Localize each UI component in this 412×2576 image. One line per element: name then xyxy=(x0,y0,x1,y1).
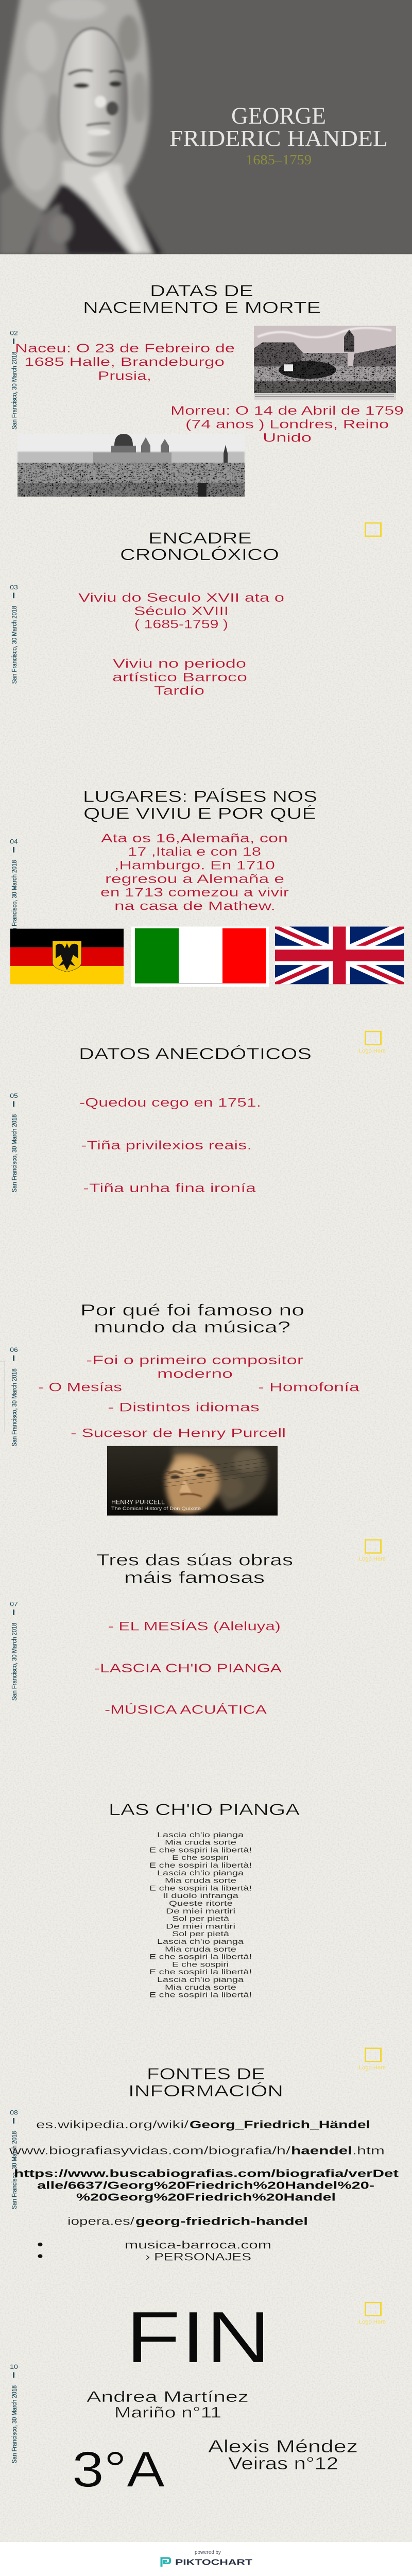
heading xyxy=(128,2065,283,2100)
author 2 xyxy=(208,2436,358,2473)
flag: United Kingdom xyxy=(275,927,404,984)
lyrics text block: E che sospiri xyxy=(172,1854,229,1862)
source: musica-barroca list xyxy=(38,2239,271,2263)
heading: máis famosas xyxy=(124,1569,265,1587)
anecdotes list: -Quedou cego en 1751. xyxy=(79,1095,261,1109)
lyrics text block: E che sospiri la libertà! xyxy=(149,1953,252,1961)
logo placeholder 3 xyxy=(359,1540,386,1562)
lyrics text block: E che sospiri la libertà! xyxy=(149,1969,252,1976)
heading: LUGARES: PAÍSES NOS xyxy=(83,788,317,806)
footer: powered by Piktochart: powered by xyxy=(195,2550,221,2555)
section 08: fontes de informacion xyxy=(9,2065,399,2263)
chronology text xyxy=(78,590,284,631)
logo placeholder 4 xyxy=(359,2048,386,2071)
reasons list: - Homofonía xyxy=(258,1380,359,1394)
lyrics text block: E che sospiri la libertà! xyxy=(149,1861,252,1870)
hero title text xyxy=(170,108,386,165)
source: wikipedia: es.wikipedia.org/wiki/ xyxy=(36,2119,189,2131)
chronology text: Viviu do Seculo XVII ata o xyxy=(78,590,284,604)
side date label 06: San Francisco, 30 March 2018 xyxy=(11,1368,18,1447)
anecdotes list xyxy=(79,1095,261,1195)
section 03: encadre cronoloxico xyxy=(10,530,284,698)
big FIN title: FIN xyxy=(126,2296,271,2378)
period text: Tardío xyxy=(154,684,204,698)
source: buscabiografias: https://www.buscabiografias.com/biografia/verDet xyxy=(14,2167,399,2179)
author 1: Andrea Martínez xyxy=(87,2388,249,2405)
lyrics text block: Lascia ch'io pianga xyxy=(157,1938,244,1946)
logo placeholder 4: Logo Here xyxy=(359,2064,386,2071)
works list xyxy=(94,1619,282,1717)
author 2: Veiras n°12 xyxy=(228,2453,338,2473)
places text: ,Hamburgo. En 1710 xyxy=(114,858,275,872)
heading: DATOS ANECDÓTICOS xyxy=(79,1045,312,1063)
birth text: Prusia, xyxy=(98,369,151,383)
logo placeholder 5: Logo Here xyxy=(359,2318,386,2325)
side date label 05 xyxy=(10,1092,18,1192)
side date label 10 xyxy=(10,2363,18,2463)
places text: regresou a Alemaña e xyxy=(105,872,284,886)
side date label 02 xyxy=(10,330,18,430)
section 06: famoso no mundo da musica xyxy=(0,1302,359,1516)
works list: -MÚSICA ACUÁTICA xyxy=(105,1703,267,1717)
lyrics text block: Lascia ch'io pianga xyxy=(157,1869,244,1877)
side date label 03: 03 xyxy=(10,584,18,591)
period text: artístico Barroco xyxy=(112,670,247,684)
side date label 04 xyxy=(10,838,18,938)
heading: INFORMACIÓN xyxy=(128,2082,283,2100)
heading: CRONOLÓXICO xyxy=(120,546,279,564)
birth text xyxy=(15,342,235,383)
logo placeholder 5 xyxy=(359,2302,386,2325)
side date label 04: San Francisco, 30 March 2018 xyxy=(11,860,18,938)
reasons list: -Foi o primeiro compositor xyxy=(86,1353,303,1367)
places text: Ata os 16,Alemaña, con xyxy=(101,831,288,845)
death text: Morreu: O 14 de Abril de 1759 xyxy=(170,404,404,417)
lyrics text block: Mia cruda sorte xyxy=(165,1984,236,1991)
lyrics text block: De miei martiri xyxy=(166,1923,235,1930)
reasons list xyxy=(38,1353,359,1440)
reasons list: - O Mesías xyxy=(38,1380,122,1394)
logo placeholder 2 xyxy=(359,1031,386,1054)
hero title text: FRIDERIC HANDEL xyxy=(169,125,388,151)
author 2: Alexis Méndez xyxy=(208,2436,358,2456)
lyrics text block: De miei martiri xyxy=(166,1907,235,1915)
places text: 17 ,Italia e con 18 xyxy=(128,845,261,859)
lyrics text block: E che sospiri la libertà! xyxy=(149,1991,252,1999)
side date label 08 xyxy=(10,2109,18,2209)
lyrics text block: Queste ritorte xyxy=(169,1900,233,1908)
flag: Italy xyxy=(131,927,269,987)
image: London skyline xyxy=(18,434,245,497)
source: biografiasyvidas: .htm xyxy=(352,2145,385,2157)
source: buscabiografias: %20Georg%20Friedrich%20Handel xyxy=(76,2191,336,2203)
lyrics text block xyxy=(149,1831,252,1999)
side date label 07 xyxy=(10,1601,18,1701)
side date label 02: San Francisco, 30 March 2018 xyxy=(11,352,18,430)
lyrics text block: Mia cruda sorte xyxy=(165,1839,236,1846)
side date label 07: 07 xyxy=(10,1601,18,1607)
side date label 08: 08 xyxy=(10,2109,18,2116)
death text: Unido xyxy=(263,431,312,445)
lyrics text block: Mia cruda sorte xyxy=(165,1877,236,1885)
lyrics text block: E che sospiri xyxy=(172,1961,229,1969)
source: musica-barroca list: › PERSONAJES xyxy=(145,2250,251,2263)
footer: powered by Piktochart xyxy=(0,2542,412,2576)
side date label 04: 04 xyxy=(10,838,18,845)
side date label 07: San Francisco, 30 March 2018 xyxy=(11,1623,18,1701)
icon: Piktochart logo xyxy=(162,2558,170,2567)
lyrics text block: E che sospiri la libertà! xyxy=(149,1846,252,1854)
source: buscabiografias xyxy=(14,2167,399,2203)
hero title text: 1685–1759 xyxy=(246,151,312,167)
lyrics text block: Lascia ch'io pianga xyxy=(157,1976,244,1984)
period text: Viviu no periodo xyxy=(113,656,246,670)
hero title text: GEORGE xyxy=(231,103,326,129)
image: Halle engraving xyxy=(254,326,396,400)
logo placeholder 1 xyxy=(366,523,381,536)
heading: LAS CH'IO PIANGA xyxy=(109,1801,300,1819)
heading: DATAS DE xyxy=(150,282,253,300)
side date label 02: 02 xyxy=(10,330,18,336)
source: wikipedia: Georg_Friedrich_Händel xyxy=(190,2119,370,2131)
heading: Tres das súas obras xyxy=(96,1552,293,1569)
lyrics text block: Sol per pietà xyxy=(172,1915,229,1923)
chronology text: Século XVIII xyxy=(134,604,229,618)
lyrics text block: Mia cruda sorte xyxy=(165,1945,236,1953)
period text xyxy=(112,656,247,698)
side date label 10: San Francisco, 30 March 2018 xyxy=(11,2385,18,2463)
death text xyxy=(170,404,404,445)
heading xyxy=(120,530,279,564)
lyrics text block: Lascia ch'io pianga xyxy=(157,1831,244,1839)
birth text: Naceu: O 23 de Febreiro de xyxy=(15,342,235,355)
reasons list: - Sucesor de Henry Purcell xyxy=(71,1426,286,1440)
heading: QUE VIVIU E POR QUÉ xyxy=(83,805,316,823)
heading xyxy=(83,788,317,823)
side date label 10: 10 xyxy=(10,2363,18,2370)
side date label 03: San Francisco, 30 March 2018 xyxy=(11,606,18,684)
source: biografiasyvidas: www.biografiasyvidas.com/biografia/h/ xyxy=(9,2145,291,2157)
author 1: Mariño n°11 xyxy=(114,2403,221,2421)
birth text: 1685 Halle, Brandeburgo xyxy=(24,355,225,369)
footer: powered by Piktochart: PIKTOCHART xyxy=(175,2557,252,2567)
side date label 05: San Francisco, 30 March 2018 xyxy=(11,1114,18,1192)
logo placeholder 3: Logo Here xyxy=(359,1555,386,1562)
heading: ENCADRE xyxy=(148,530,252,547)
places text: en 1713 comezou a vivir xyxy=(100,886,289,900)
heading: mundo da música? xyxy=(94,1318,290,1336)
heading: Por qué foi famoso no xyxy=(80,1302,304,1319)
author 1 xyxy=(87,2388,249,2421)
flag: Germany xyxy=(10,929,124,984)
heading: FONTES DE xyxy=(147,2065,265,2083)
section 02: datas de nacemento e morte xyxy=(10,282,404,497)
source: musica-barroca list: musica-barroca.com xyxy=(125,2239,271,2251)
source: biografiasyvidas xyxy=(9,2145,385,2157)
side date label 03 xyxy=(10,584,18,684)
lyrics text block: Sol per pietà xyxy=(172,1930,229,1938)
reasons list: moderno xyxy=(157,1367,233,1381)
side date label 08: San Francisco, 30 March 2018 xyxy=(11,2131,18,2209)
section 05: datos anecdoticos xyxy=(10,1045,312,1195)
lyrics text block: Il duolo infranga xyxy=(163,1892,238,1900)
section: lyrics xyxy=(109,1801,300,1999)
side date label 05: 05 xyxy=(10,1092,18,1099)
works list: - EL MESÍAS (Aleluya) xyxy=(108,1619,281,1633)
death text: (74 anos ) Londres, Reino xyxy=(185,417,389,431)
source: iopera xyxy=(67,2215,308,2228)
thin outlined box at left edge xyxy=(0,1361,5,1432)
lyrics text block: E che sospiri la libertà! xyxy=(149,1885,252,1892)
places text: na casa de Mathew. xyxy=(114,899,276,913)
places text xyxy=(100,831,289,913)
source: biografiasyvidas: haendel xyxy=(291,2145,352,2157)
source: iopera: iopera.es/ xyxy=(67,2215,134,2228)
anecdotes list: -Tiña privilexios reais. xyxy=(81,1139,252,1152)
side date label 06 xyxy=(10,1346,18,1447)
source: wikipedia xyxy=(36,2119,370,2131)
works list: -LASCIA CH'IO PIANGA xyxy=(94,1661,282,1675)
logo placeholder 2: Logo Here xyxy=(359,1047,386,1054)
heading xyxy=(80,1302,304,1336)
anecdotes list: -Tiña unha fina ironía xyxy=(83,1181,256,1195)
image: Henry Purcell: HENRY PURCELL xyxy=(111,1499,165,1505)
heading xyxy=(96,1552,293,1587)
source: iopera: georg-friedrich-handel xyxy=(135,2215,308,2228)
reasons list: - Distintos idiomas xyxy=(108,1400,260,1414)
class label: 3°A xyxy=(72,2441,165,2498)
section 07: tres obras xyxy=(10,1552,293,1717)
hero image: portrait of Handel xyxy=(0,0,412,254)
chronology text: ( 1685-1759 ) xyxy=(134,617,228,631)
image: Henry Purcell xyxy=(107,1446,278,1516)
heading xyxy=(83,282,321,317)
section 04: lugares xyxy=(10,788,404,987)
heading: NACEMENTO E MORTE xyxy=(83,299,321,317)
section 10: fin and credits xyxy=(10,2296,358,2498)
source: buscabiografias: alle/6637/Georg%20Friedrich%20Handel%20- xyxy=(37,2179,374,2191)
side date label 06: 06 xyxy=(10,1346,18,1353)
image: Henry Purcell: The Comical History of Don Quixote xyxy=(111,1506,201,1512)
